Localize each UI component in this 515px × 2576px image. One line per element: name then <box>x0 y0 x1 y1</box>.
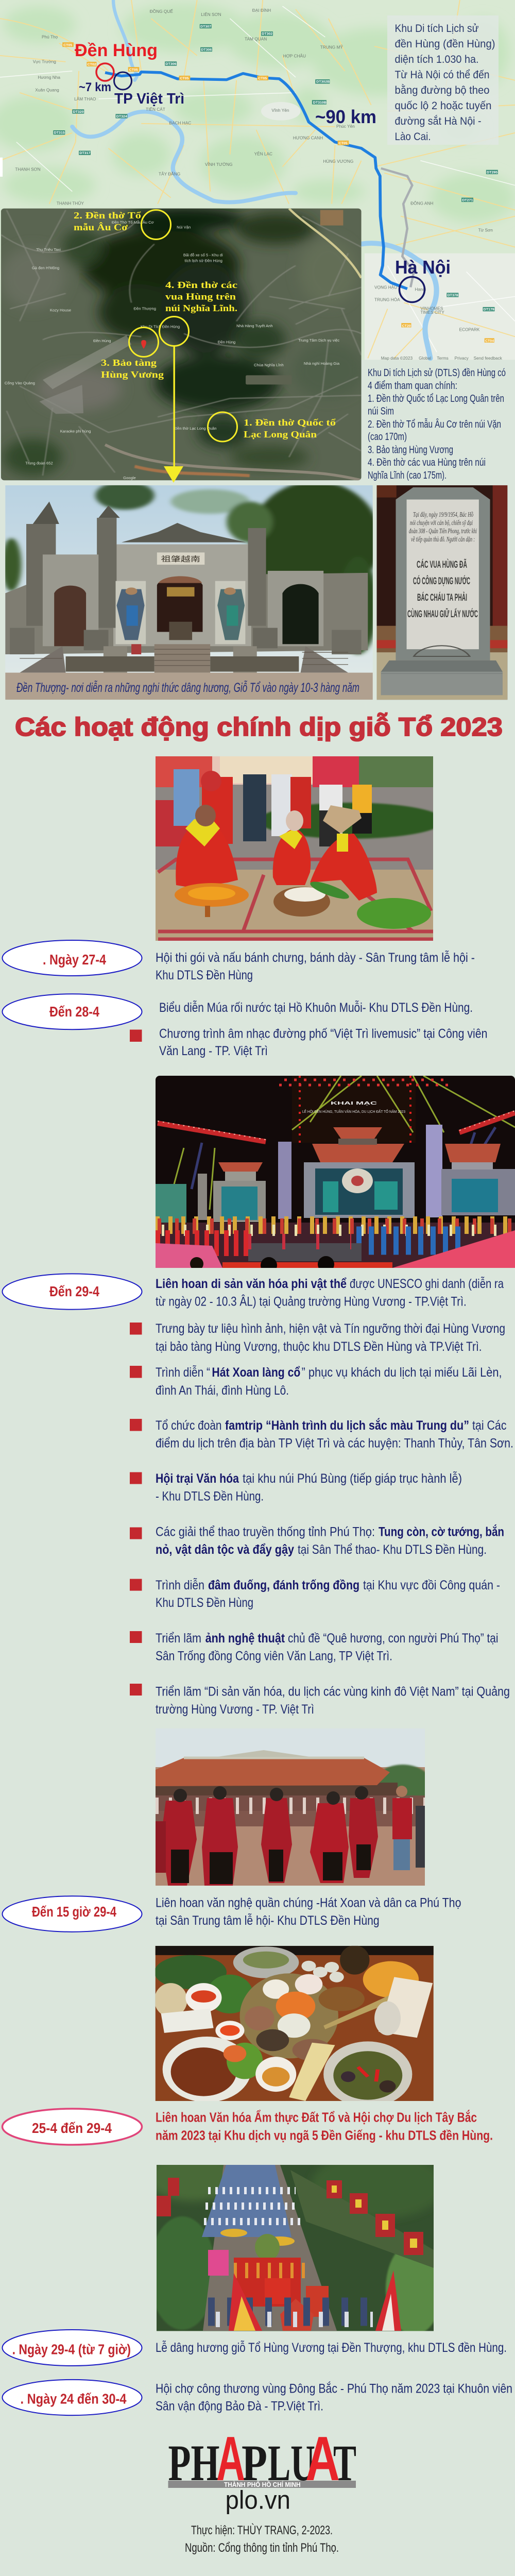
item: intangible heritage festival: Liên hoan di sản văn hóa phi vật thể <box>156 1277 347 1291</box>
text block: site introduction: diện tích 1.030 ha. <box>394 54 479 65</box>
road number badges: DT302 <box>262 32 273 36</box>
date oval: 29-4 from 7am: . Ngày 29-4 (từ 7 giờ) <box>12 2341 131 2358</box>
item: intangible heritage festival <box>156 1276 504 1309</box>
singers in red dresses <box>156 1786 425 1888</box>
item: famtrip: famtrip “Hành trình du lịch sắc màu Trung du” <box>225 1417 469 1433</box>
contestant figures <box>176 805 377 901</box>
road number badges: DT315 <box>54 131 65 135</box>
map place names: ECOPARK <box>459 328 480 332</box>
map place names: ĐẠI ĐÌNH <box>252 8 271 13</box>
satellite place names: Thụ Triệu Taxi <box>36 247 61 252</box>
map place names: TAM QUAN <box>245 37 267 41</box>
photo: opening stage: LỄ HỘI ĐỀN HÙNG, TUẦN VĂN HÓA, DU LỊCH ĐẤT TỔ NĂM 2023 <box>302 1109 405 1114</box>
satellite circle: site 2 <box>141 210 171 239</box>
road number badges: DT320 <box>73 110 84 114</box>
map place names <box>15 8 503 361</box>
yellow arrow <box>164 346 183 483</box>
map place names: Phúc Yên <box>336 124 355 129</box>
satellite place names: Trung Tâm Dịch vụ việc <box>298 338 340 343</box>
item: capitals exhibition <box>156 1685 510 1717</box>
road number badges: CT05 <box>180 77 189 80</box>
date oval: 15h 29-4 <box>2 1896 142 1932</box>
text block: site introduction: Khu Di tích Lịch sử <box>394 23 479 35</box>
logo: Phap Luat: THÀNH PHỐ HỒ CHÍ MINH <box>224 2481 301 2488</box>
date oval: 29-4: Đến 29-4 <box>49 1283 99 1299</box>
road number badges: DT317 <box>79 151 91 155</box>
bullet <box>130 1323 142 1334</box>
text: 27-4 activity <box>156 950 475 982</box>
text: street music: Văn Lang - TP. Việt Trì <box>159 1044 268 1058</box>
map place names: Vĩnh Yên <box>271 108 289 113</box>
stele inscription: nói chuyện với cán bộ, chiến sỹ đại <box>410 519 473 527</box>
map place names: Phú Thọ <box>42 35 58 39</box>
bullet <box>130 1527 142 1539</box>
road number badges: DT306 <box>201 48 212 52</box>
text: 27-4 activity: Hội thi gói và nấu bánh chưng, bánh dày - Sân Trung tâm lễ hội - <box>156 950 475 965</box>
bullet <box>130 1029 142 1042</box>
credits <box>185 2523 339 2555</box>
logo: Phap Luat <box>168 2424 356 2494</box>
road number badges: DT179 <box>484 308 494 311</box>
bullet <box>130 1419 142 1431</box>
map place names: LIÊN SƠN <box>201 12 221 17</box>
photo: Xoan singing at communal house <box>156 1728 425 1886</box>
road number badges: CT05 <box>339 142 348 145</box>
satellite label: site 1 <box>244 417 336 439</box>
item: art photo exhibition <box>156 1631 499 1664</box>
road number badges: DT310B <box>313 101 327 105</box>
stele inscription: Tại đây, ngày 19/9/1954, Bác Hồ <box>413 511 473 519</box>
item: famtrip <box>156 1417 513 1451</box>
satellite place names: Đền Thượng <box>134 307 156 311</box>
satellite label: site 2 <box>74 210 141 232</box>
satellite circle: site 4 <box>160 316 188 346</box>
date oval: 28-4: Đến 28-4 <box>49 1004 99 1020</box>
text: Xoan folk festival: tại Sân Trung tâm lễ hội- Khu DTLS Đền Hùng <box>156 1913 380 1928</box>
map place names: THANH SƠN <box>15 167 41 172</box>
satellite label: site 4: 4. Đền thờ các <box>165 280 237 290</box>
item: bronze drums <box>156 1578 500 1610</box>
road number badges: DT324 <box>116 115 127 118</box>
satellite circle: site 1 <box>208 412 237 442</box>
photo: banh chung contest <box>156 756 433 941</box>
map marker: Ha Noi <box>400 277 424 302</box>
map label: 7 km: ~7 km <box>79 80 111 94</box>
map place names: LÂM THAO <box>74 97 96 101</box>
road number badges: DT271 <box>462 198 473 202</box>
photo: incense procession <box>157 2165 434 2331</box>
road number badges: CT05 <box>129 68 138 72</box>
map place names: TIMES CITY <box>420 310 444 315</box>
stele inscription: về tiếp quản thủ đô. Người căn dặn : <box>411 536 475 544</box>
text: Xoan folk festival: Liên hoan văn nghệ quần chúng -Hát Xoan và dân ca Phú Thọ <box>156 1895 461 1910</box>
text block: site introduction: đường sắt Hà Nội - <box>394 115 481 127</box>
satellite place names: Đền Hùng <box>218 340 235 345</box>
satellite label: site 3 <box>101 358 164 380</box>
credits: Nguồn: Cổng thông tin tỉnh Phú Thọ. <box>185 2541 339 2555</box>
satellite place names: Núi Vận <box>177 225 191 230</box>
bullet <box>130 1631 142 1643</box>
satellite place names: Nhà nghỉ Hoàng Gia <box>304 361 340 366</box>
item: Hat Xoan: Trình diễn “ <box>156 1365 210 1380</box>
road number badges: DT307 <box>200 25 211 28</box>
map label: 90 km: ~90 km <box>315 106 376 127</box>
satellite place names: Trung đoàn 652 <box>25 461 53 466</box>
bullet <box>130 1472 142 1484</box>
bullet <box>130 1684 142 1696</box>
map place names: VINHOMES <box>420 307 443 311</box>
map place names: THANH THỦY <box>57 201 84 206</box>
credits: Thực hiện: THÙY TRANG, 2-2023. <box>191 2523 333 2537</box>
text block: site introduction: đền Hùng (đền Hùng) <box>394 38 495 50</box>
satellite label: site 3: Hùng Vương <box>101 369 164 380</box>
map place names: Xuân Quang <box>35 88 59 92</box>
satellite place names: Đền Thờ Tổ Mẫu Âu Cơ <box>112 220 154 225</box>
photo: Den Thuong temple: 祖肇越南 <box>161 555 200 564</box>
title: Các hoạt động chính dịp giỗ Tổ 2023 <box>15 713 503 741</box>
item: bronze drums: đâm đuống, đánh trống đồng <box>208 1578 359 1592</box>
map place names: ĐÔNG ANH <box>410 201 434 206</box>
text block: four main sights: 4. Đền thờ các vua Hùng trên núi <box>368 457 486 468</box>
text block: four main sights <box>368 367 506 481</box>
text block: site introduction: Lào Cai. <box>394 131 431 143</box>
road number badges: DT295 <box>487 171 497 174</box>
satellite place names: Khu Di Tích Đền Hùng <box>141 325 180 329</box>
photo: food tray <box>156 1945 434 2101</box>
text block: site introduction: bằng đường bộ theo <box>394 84 489 96</box>
date oval: 28-4 <box>2 994 142 1029</box>
satellite label: site 2: 2. Đền thờ Tổ <box>74 210 141 221</box>
item: Hat Xoan <box>156 1365 502 1398</box>
item: culture camp: - Khu DTLS Đền Hùng. <box>156 1489 264 1504</box>
bullet <box>130 1366 142 1378</box>
item: art photo exhibition: Triển lãm <box>156 1631 201 1646</box>
alternate route <box>381 168 414 287</box>
photo caption: Đền Thượng- nơi diễn ra những nghi thức dâng hương, Giỗ Tổ vào ngày 10-3 hàng năm <box>16 680 359 695</box>
item: bronze drums: Trình diễn <box>156 1578 204 1592</box>
satellite place names: Chùa Nghĩa Lĩnh <box>254 363 284 367</box>
text block: four main sights: 4 điểm tham quan chính: <box>368 380 457 392</box>
logo: Phap Luat: LU <box>268 2434 315 2492</box>
red banners <box>157 2178 423 2255</box>
item: traditional sports <box>156 1524 504 1557</box>
item: exhibition at museum <box>156 1321 505 1354</box>
satellite label: site 1: Lạc Long Quân <box>244 429 317 439</box>
performers crowd <box>156 1223 515 1274</box>
map place names: Privacy <box>455 356 469 361</box>
map place names: HƯƠNG CANH <box>293 136 323 140</box>
item: culture camp: Hội trại Văn hóa <box>156 1471 239 1486</box>
satellite label: site 2: mẫu Âu Cơ <box>74 222 128 232</box>
text: trade fair: Sân vận động Bảo Đà - TP.Việt Trì. <box>156 2399 323 2413</box>
map place names: Terms <box>437 356 449 361</box>
text: Xoan folk festival <box>156 1895 461 1928</box>
satellite place names: Đền Hùng <box>93 338 111 343</box>
item: traditional sports: nỏ, vật dân tộc và đẩy gậy <box>156 1543 294 1557</box>
satellite label: site 3: 3. Bảo tàng <box>101 358 157 368</box>
item: famtrip: tại Các <box>472 1418 507 1433</box>
text block: four main sights: 3. Bảo tàng Hùng Vương <box>368 444 453 455</box>
text: 27-4 activity: Khu DTLS Đền Hùng <box>156 968 253 982</box>
road number badges: CT05 <box>63 43 72 47</box>
satellite label: site 4: núi Nghĩa Lĩnh. <box>165 303 237 313</box>
date oval: 27-4 <box>2 940 142 976</box>
map place names: TÂY ĐẰNG <box>159 172 180 176</box>
road number badges: DT302B <box>316 80 330 84</box>
photo: Den Thuong temple <box>5 485 373 700</box>
item: bronze drums: Khu DTLS Đền Hùng <box>156 1596 253 1610</box>
map place names: VĨNH TƯỜNG <box>205 162 233 167</box>
text: plo.vn: plo.vn <box>226 2485 290 2514</box>
map place names: Global <box>419 356 431 361</box>
map place names: ĐỒNG QUẾ <box>150 9 174 14</box>
satellite place names: Cổng Vào Quảng <box>5 381 35 385</box>
photo: opening stage <box>156 1076 515 1268</box>
satellite place names: Nhà Hàng Tuyết Anh <box>236 324 273 328</box>
item: art photo exhibition: ảnh nghệ thuật <box>205 1631 285 1646</box>
item: art photo exhibition: Sân Trống đồng Công viên Văn Lang, TP Việt Trì. <box>156 1649 392 1664</box>
road number badges: CT04 <box>485 340 494 343</box>
map marker: Den Hung <box>96 63 114 81</box>
item: culture camp <box>156 1471 462 1504</box>
text block: four main sights: (cao 170m) <box>368 431 407 443</box>
satellite place names <box>5 220 340 480</box>
date oval: 27-4: . Ngày 27-4 <box>43 952 106 968</box>
road number badges: CT05 <box>258 77 267 80</box>
map label: TP Viet Tri: TP Việt Trì <box>114 91 184 107</box>
logo: Phap Luat: T <box>333 2434 356 2492</box>
satellite place names: Bãi đỗ xe số 5 - Khu di <box>183 253 223 258</box>
text: food festival <box>156 2109 493 2143</box>
map marker: TP Viet Tri <box>114 72 132 90</box>
map place names: TRUNG HÒA <box>374 298 400 302</box>
map place names: BẠCH HẠC <box>169 121 191 126</box>
map place names: VỌNG HẬU <box>374 285 397 290</box>
text block: four main sights: núi Sim <box>368 406 394 417</box>
text: street music <box>159 1026 487 1058</box>
map place names: Map data ©2023 <box>381 356 413 361</box>
text block: site introduction: quốc lộ 2 hoặc tuyến <box>394 100 491 112</box>
map place names: HÙNG VƯƠNG <box>323 159 353 164</box>
route line <box>105 72 407 289</box>
map place names: Từ Sơn <box>478 228 493 233</box>
item: Hat Xoan: Hát Xoan làng cổ <box>212 1365 300 1380</box>
map place names: Hương Nha <box>38 75 61 80</box>
map place names: YÊN LẠC <box>254 152 272 156</box>
satellite place names: Gà đen H'Mông <box>32 266 59 270</box>
date oval: 24 to 30-4: . Ngày 24 đến 30-4 <box>21 2391 127 2407</box>
satellite label: site 4: vua Hùng trên <box>165 292 236 302</box>
road number badges: DT378 <box>448 294 458 297</box>
logo: Phap Luat: A <box>305 2424 340 2494</box>
road number badges: DT306 <box>165 62 177 66</box>
text: trade fair <box>156 2381 512 2413</box>
logo: Phap Luat: A <box>216 2424 245 2494</box>
satellite place names: tích lịch sử Đền Hùng <box>184 259 222 263</box>
map place names: HỢP CHÂU <box>283 54 306 58</box>
map place names: TRUNG MỸ <box>320 45 344 50</box>
item: Hat Xoan: đình An Thái, đình Hùng Lô. <box>156 1383 289 1398</box>
satellite map of the site <box>1 208 362 480</box>
satellite place names: Google <box>123 476 136 480</box>
map label: Den Hung: Đền Hùng <box>75 41 158 60</box>
satellite label: site 1: 1. Đền thờ Quốc tổ <box>244 417 336 428</box>
map place names: Hanoi <box>415 287 426 292</box>
photo: opening stage: KHAI MẠC <box>331 1101 377 1106</box>
stele inscription <box>407 511 478 620</box>
item: culture camp: tại khu núi Phú Bùng (tiếp giáp trục hành lễ) <box>243 1471 462 1486</box>
map place names: TIÊN CÁT <box>146 107 165 112</box>
item: famtrip: Tổ chức đoàn <box>156 1418 221 1433</box>
satellite place names: Kozy House <box>50 308 71 312</box>
red pin: museum <box>141 340 146 349</box>
satellite place names: Đền thờ Lạc Long Quân <box>175 426 216 431</box>
logo: Phap Luat: P <box>242 2434 267 2492</box>
road number badges: CT02 <box>88 63 96 66</box>
stele inscription: BÁC CHÁU TA PHẢI <box>417 592 467 603</box>
satellite place names: Karaoke phi hùng <box>60 429 91 433</box>
date oval: 24 to 30-4 <box>2 2380 142 2415</box>
text block: site introduction <box>387 15 499 145</box>
date oval: 15h 29-4: Đến 15 giờ 29-4 <box>32 1904 116 1920</box>
stele inscription: CÁC VUA HÙNG ĐÃ <box>417 559 467 570</box>
date oval: 25-4 to 29-4: 25-4 đến 29-4 <box>32 2120 112 2136</box>
text block: site introduction: Từ Hà Nội có thể đến <box>394 69 489 81</box>
map place names: Send feedback <box>474 356 503 361</box>
logo: Phap Luat: PH <box>168 2434 219 2492</box>
date oval: 29-4 from 7am <box>2 2330 142 2366</box>
bullet <box>130 1579 142 1591</box>
text block: four main sights: Nghĩa Lĩnh (cao 175m). <box>368 470 447 481</box>
photo: stone stele <box>377 485 508 700</box>
road number badges <box>53 24 498 343</box>
date oval: 29-4 <box>2 1274 142 1310</box>
map place names: Vực Trường <box>33 60 56 64</box>
item: capitals exhibition: trường Hùng Vương - TP. Việt Trì <box>156 1702 314 1717</box>
item: traditional sports: Các giải thể thao truyền thống tỉnh Phú Thọ: <box>156 1525 375 1539</box>
road number badges: CT20 <box>402 324 411 328</box>
map label: Ha Noi: Hà Nội <box>395 257 451 278</box>
date oval: 25-4 to 29-4 <box>2 2109 142 2145</box>
satellite label: site 4 <box>165 280 237 313</box>
satellite circle: site 3 <box>129 328 159 357</box>
road map: Den Hung to Ha Noi <box>0 0 515 361</box>
